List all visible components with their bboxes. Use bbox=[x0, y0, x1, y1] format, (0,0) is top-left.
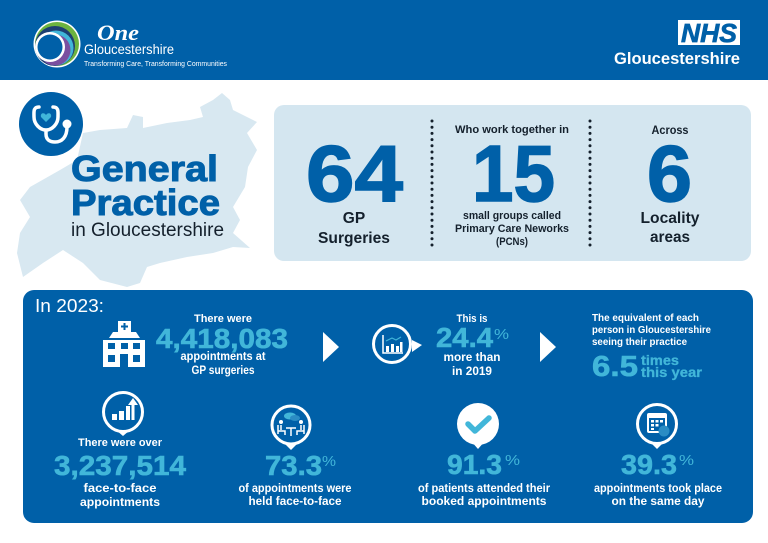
icon: calendar pin bbox=[638, 404, 676, 449]
stat: 64 GP surgeries: GP bbox=[343, 210, 365, 227]
header band bbox=[0, 0, 768, 80]
heading: Practice bbox=[71, 182, 220, 223]
logo wordmark bbox=[84, 20, 227, 68]
panel: key numbers bbox=[274, 105, 751, 261]
stat: increase since 2019: more than bbox=[444, 350, 500, 364]
stat: visits per person: The equivalent of each bbox=[592, 313, 699, 324]
stat: increase since 2019 bbox=[436, 313, 509, 378]
logo wordmark: Transforming Care, Transforming Communities bbox=[84, 61, 227, 68]
stat: face-to-face count: There were over bbox=[78, 437, 163, 449]
stat: increase since 2019: This is bbox=[456, 313, 488, 325]
stat: 15 PCNs bbox=[455, 124, 569, 248]
stat: face-to-face count: 3,237,514 bbox=[54, 450, 186, 481]
stat: 15 PCNs: Primary Care Neworks bbox=[455, 223, 569, 235]
stat: attendance: booked appointments bbox=[422, 496, 546, 508]
stat: attendance: % bbox=[505, 452, 520, 469]
stat: total appointments bbox=[156, 313, 288, 377]
arrow bbox=[540, 332, 556, 362]
title block with county map bbox=[17, 92, 257, 287]
stat: face-to-face count: appointments bbox=[80, 495, 160, 509]
stat: visits per person: times bbox=[641, 352, 679, 368]
stat: 6 locality areas: Locality bbox=[640, 210, 700, 227]
stat: total appointments: appointments at bbox=[180, 351, 266, 363]
panel: 2023 statistics bbox=[23, 290, 753, 523]
stat: 15 PCNs: small groups called bbox=[463, 210, 561, 222]
stat: attendance: 91.3 bbox=[447, 449, 502, 480]
stat: face-to-face share: % bbox=[322, 453, 336, 470]
stat: increase since 2019: % bbox=[494, 326, 509, 343]
stat: increase since 2019: 24.4 bbox=[436, 322, 493, 353]
stat: face-to-face share: of appointments were bbox=[238, 483, 352, 495]
stat: 64 GP surgeries: 64 bbox=[306, 129, 404, 218]
stat: attendance: of patients attended their bbox=[418, 483, 551, 495]
logo: NHS Gloucestershire: NHS bbox=[681, 18, 738, 48]
stat: total appointments: GP surgeries bbox=[192, 365, 254, 377]
stat: 6 locality areas bbox=[640, 123, 700, 246]
logo: One Gloucestershire bbox=[34, 20, 227, 68]
stat: 15 PCNs: 15 bbox=[472, 129, 555, 218]
stat: 64 GP surgeries bbox=[306, 129, 404, 247]
stat: increase since 2019: in 2019 bbox=[452, 364, 492, 378]
stat: visits per person bbox=[592, 313, 711, 383]
heading: In 2023: In 2023: bbox=[35, 295, 104, 316]
icon: rings bbox=[34, 20, 80, 68]
stat: face-to-face count bbox=[54, 437, 186, 509]
icon: consultation pin bbox=[272, 406, 310, 450]
arrow bbox=[323, 332, 339, 362]
stat: 6 locality areas: 6 bbox=[647, 129, 692, 218]
stat: 6 locality areas: areas bbox=[650, 229, 690, 246]
stat: face-to-face share bbox=[238, 450, 352, 508]
icon: check pin bbox=[457, 403, 499, 449]
stat: 15 PCNs: Who work together in bbox=[455, 124, 569, 136]
stat: face-to-face share: held face-to-face bbox=[248, 496, 342, 508]
stat: same-day appointments: % bbox=[679, 452, 694, 469]
stat: same-day appointments: on the same day bbox=[612, 496, 705, 508]
stat: total appointments: There were bbox=[194, 313, 252, 325]
stat: attendance bbox=[418, 449, 551, 508]
stat: visits per person: this year bbox=[641, 364, 703, 380]
stat: same-day appointments bbox=[594, 449, 722, 508]
heading bbox=[71, 148, 224, 241]
heading: General bbox=[71, 148, 218, 189]
icon: bar chart pin bbox=[104, 392, 142, 436]
stat: same-day appointments: 39.3 bbox=[621, 449, 677, 480]
stat: 6 locality areas: Across bbox=[652, 123, 689, 137]
county map silhouette bbox=[17, 93, 257, 287]
icon: growth chart bbox=[374, 326, 422, 362]
stat: 64 GP surgeries: Surgeries bbox=[318, 230, 390, 247]
stat: visits per person: person in Gloucestershire bbox=[592, 325, 711, 336]
logo wordmark: One bbox=[97, 20, 139, 45]
stat: visits per person: seeing their practice bbox=[592, 337, 687, 348]
stat: face-to-face share: 73.3 bbox=[265, 450, 322, 481]
icon: stethoscope bbox=[19, 92, 83, 156]
logo wordmark: Gloucestershire bbox=[84, 41, 174, 57]
stat: 15 PCNs: (PCNs) bbox=[496, 236, 528, 248]
icon: hospital bbox=[103, 321, 145, 367]
logo: NHS Gloucestershire: Gloucestershire bbox=[614, 49, 740, 68]
stat: total appointments: 4,418,083 bbox=[156, 323, 288, 354]
heading: in Gloucestershire bbox=[71, 220, 224, 241]
stat: face-to-face count: face-to-face bbox=[84, 481, 157, 495]
stat: same-day appointments: appointments took place bbox=[594, 483, 722, 495]
logo: NHS Gloucestershire bbox=[614, 18, 740, 68]
stat: visits per person: 6.5 bbox=[592, 351, 638, 383]
